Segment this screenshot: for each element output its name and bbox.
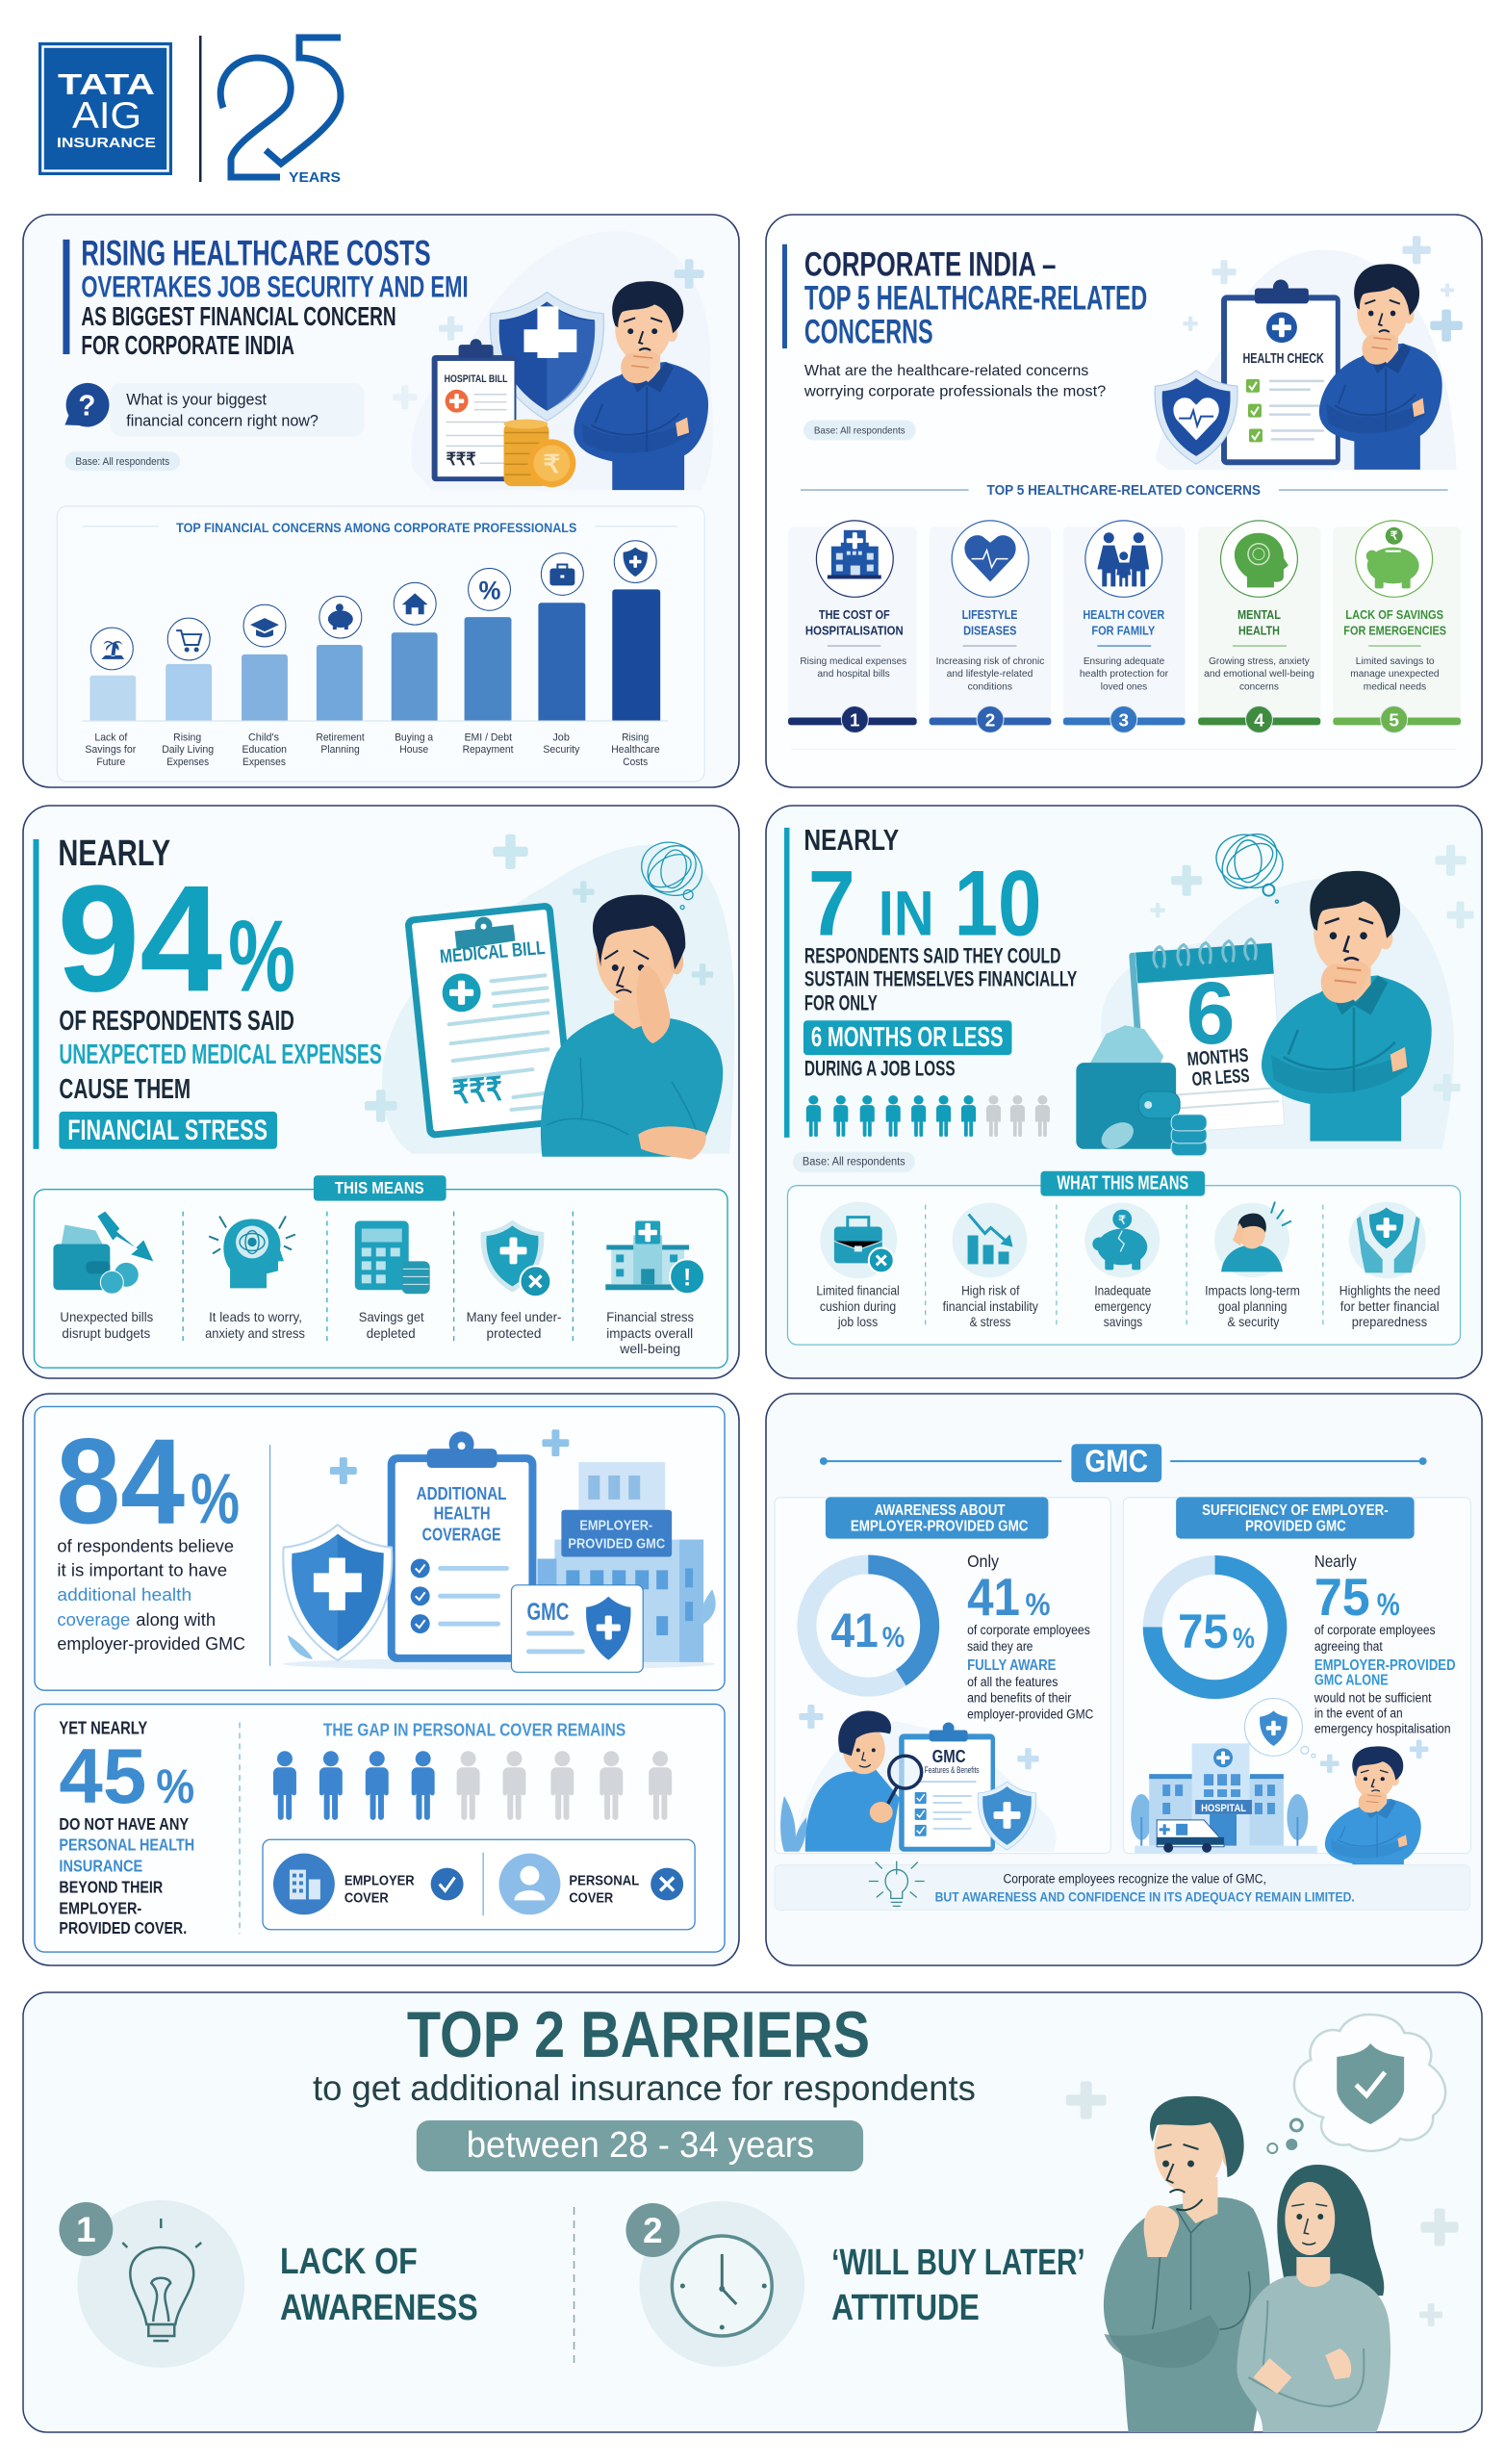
barrier 1: AWARENESS xyxy=(280,2288,478,2328)
icon: light bulb xyxy=(869,1861,925,1906)
chart labels: Future xyxy=(96,757,125,768)
awareness text xyxy=(967,1552,1093,1722)
panel: rising healthcare costs xyxy=(23,215,739,787)
heading: GMC: GMC xyxy=(1084,1443,1148,1478)
logo: Tata AIG Insurance: INSURANCE xyxy=(57,135,156,151)
barrier 2: ATTITUDE xyxy=(831,2288,980,2328)
title: TOP 5 HEALTHCARE-RELATED xyxy=(804,279,1147,317)
personal cover: COVER xyxy=(569,1889,613,1906)
concern card 3: loved ones xyxy=(1101,682,1147,693)
stat description: CAUSE THEM xyxy=(59,1074,191,1105)
chart labels: Job xyxy=(552,732,570,743)
stat description: FOR ONLY xyxy=(804,990,878,1014)
employer and personal cover comparison xyxy=(263,1839,695,1930)
icon: worried head xyxy=(209,1217,295,1288)
concern card 3: Ensuring adequate xyxy=(1084,656,1164,667)
question prompt: ? xyxy=(78,389,95,423)
logo: Tata AIG Insurance xyxy=(38,42,172,175)
what this means labels: Inadequate xyxy=(1094,1282,1151,1297)
illustration: man with health check clipboard: HEALTH CHECK xyxy=(1243,351,1324,367)
stat: 7 in 10: 7 xyxy=(808,851,855,956)
concern card 3 xyxy=(1063,521,1186,732)
illustration: young couple thinking xyxy=(1066,2015,1459,2432)
base note xyxy=(64,451,180,471)
illustration: hospital and worried man: HOSPITAL xyxy=(1201,1803,1246,1814)
pictogram: people xyxy=(273,1751,672,1820)
text: during a job loss: DURING A JOB LOSS xyxy=(804,1057,956,1081)
awareness text: and benefits of their xyxy=(967,1690,1072,1706)
awareness text: of all the features xyxy=(967,1674,1058,1689)
sufficiency text: % xyxy=(1377,1586,1400,1622)
stat: 45% xyxy=(59,1733,194,1820)
this-means labels: Many feel under- xyxy=(467,1309,562,1324)
concern card 2 xyxy=(930,521,1051,732)
concern card 5: manage unexpected xyxy=(1350,669,1440,680)
thought bubble with shield xyxy=(1267,2015,1445,2153)
chart icons: % xyxy=(479,576,501,604)
sufficiency text: would not be sufficient xyxy=(1314,1690,1432,1706)
sufficiency text: Nearly xyxy=(1314,1552,1357,1571)
concern card 1: THE COST OF xyxy=(819,607,890,622)
concern card 2: and lifestyle-related xyxy=(947,669,1033,680)
question text xyxy=(804,363,1106,400)
logo: Tata AIG Insurance: TATA xyxy=(58,67,155,101)
title accent bar xyxy=(33,839,38,1149)
heading: the gap: THE GAP IN PERSONAL COVER REMAINS xyxy=(323,1720,625,1740)
this means box xyxy=(34,1175,727,1368)
stat description xyxy=(59,1814,194,1938)
concern card 1: and hospital bills xyxy=(817,669,890,680)
man xyxy=(1104,2096,1270,2432)
base note xyxy=(804,421,916,440)
stat: 94%: % xyxy=(228,899,295,1013)
concern card 4: concerns xyxy=(1239,682,1279,693)
chart labels: Daily Living xyxy=(162,744,214,756)
question prompt: financial concern right now? xyxy=(126,413,319,430)
sufficiency text: EMPLOYER-PROVIDED xyxy=(1314,1657,1456,1674)
concern card 4: 4 xyxy=(1254,710,1264,731)
age pill: between 28 - 34 years xyxy=(467,2125,814,2166)
this-means labels: disrupt budgets xyxy=(62,1325,150,1341)
stat: 45%: % xyxy=(156,1759,194,1813)
logo: Tata AIG Insurance: AIG xyxy=(72,95,141,137)
concern card 5: 5 xyxy=(1389,710,1399,731)
sufficiency text: GMC ALONE xyxy=(1314,1673,1389,1689)
what this means labels: & stress xyxy=(970,1314,1011,1329)
bar chart: top financial concerns: TOP FINANCIAL CONCERNS AMONG CORPORATE PROFESSIONALS xyxy=(176,521,576,535)
illustration: shield, clipboard, building, GMC card: HEALTH xyxy=(434,1504,491,1525)
icon: light bulb xyxy=(122,2219,201,2341)
summary strip: Corporate employees recognize the value of GMC, xyxy=(1004,1871,1266,1886)
what this means labels xyxy=(816,1282,1441,1329)
employer cover xyxy=(273,1854,464,1914)
base note xyxy=(793,1152,915,1172)
sufficiency text xyxy=(1314,1552,1456,1735)
donut: 41% xyxy=(806,1564,930,1687)
concern card 1: 1 xyxy=(850,710,860,731)
this-means labels: Unexpected bills xyxy=(60,1309,153,1324)
illustration: worried man with hospital bill and shield xyxy=(393,231,713,490)
stat: 45%: 45 xyxy=(59,1733,146,1820)
title: RISING HEALTHCARE COSTS xyxy=(81,234,431,273)
stat: 7 in 10 xyxy=(808,851,1041,956)
question prompt: What is your biggest xyxy=(126,392,267,409)
concern card 5: Limited savings to xyxy=(1356,656,1435,667)
icon: hospital alert: ! xyxy=(683,1264,691,1291)
what this means labels: goal planning xyxy=(1218,1298,1287,1314)
employer cover: EMPLOYER xyxy=(344,1873,415,1888)
illustration: man inspecting GMC clipboard xyxy=(780,1705,1057,1852)
heading: yet nearly: YET NEARLY xyxy=(59,1718,148,1738)
icon: declining chart xyxy=(968,1215,1012,1264)
concern card 5 xyxy=(1333,521,1461,732)
heading: nearly: NEARLY xyxy=(804,823,900,857)
concern card 2: Increasing risk of chronic xyxy=(936,656,1044,667)
barrier 2: 2 xyxy=(643,2211,663,2250)
awareness text: % xyxy=(1025,1586,1050,1622)
concern card 4: HEALTH xyxy=(1238,624,1280,638)
bar chart: top financial concerns xyxy=(57,506,704,782)
pictogram: 7 of 10 people xyxy=(806,1095,1050,1137)
title xyxy=(81,234,469,360)
chart labels: Repayment xyxy=(463,744,513,756)
awareness text: of corporate employees xyxy=(967,1622,1090,1637)
panel: top 2 barriers xyxy=(23,1992,1482,2432)
awareness text: said they are xyxy=(967,1638,1033,1654)
stat description: coverage xyxy=(57,1610,130,1630)
illustration: worried man with hospital bill and shield: ₹₹₹ xyxy=(446,449,476,469)
this-means labels: It leads to worry, xyxy=(209,1309,302,1324)
barrier 2: ‘WILL BUY LATER’ xyxy=(831,2243,1085,2283)
logo: 25 years: YEARS xyxy=(289,169,341,186)
subtitle: to get additional insurance for respondents xyxy=(313,2068,976,2108)
chart labels: Expenses xyxy=(242,757,286,768)
icon: clock xyxy=(672,2236,772,2336)
this-means labels: impacts overall xyxy=(606,1325,693,1341)
summary strip xyxy=(775,1861,1470,1910)
what this means labels: preparedness xyxy=(1352,1314,1427,1329)
illustration: shield, clipboard, building, GMC card: ADDITIONAL xyxy=(417,1484,506,1504)
card: sufficiency xyxy=(1123,1497,1471,1883)
barrier 1 xyxy=(59,2200,478,2368)
barrier 1: LACK OF xyxy=(280,2242,418,2282)
concern card 3: health protection for xyxy=(1080,669,1169,680)
chart labels: Costs xyxy=(623,757,649,768)
title accent bar xyxy=(63,240,69,354)
chart icons xyxy=(90,541,656,670)
chart labels: Rising xyxy=(173,732,201,743)
sufficiency text: agreeing that xyxy=(1314,1638,1383,1654)
age pill xyxy=(417,2120,863,2171)
question text: worrying corporate professionals the most? xyxy=(804,384,1106,400)
stat description: INSURANCE xyxy=(59,1857,142,1876)
heading: nearly: NEARLY xyxy=(58,834,170,874)
donut: 41%: 41 xyxy=(830,1604,879,1657)
chart labels: Planning xyxy=(320,744,360,756)
panel: 94% financial stress xyxy=(23,806,739,1378)
donut: 75%: 75 xyxy=(1178,1604,1229,1658)
panel: 84% additional coverage xyxy=(23,1394,739,1965)
title accent bar xyxy=(784,828,789,1138)
stat description: PROVIDED COVER. xyxy=(59,1918,187,1938)
illustration: stressed man with medical bill xyxy=(365,834,735,1160)
concern card 1 xyxy=(788,521,917,732)
title: CORPORATE INDIA – xyxy=(804,246,1056,284)
concern card 3: FOR FAMILY xyxy=(1091,624,1156,638)
personal cover: PERSONAL xyxy=(569,1873,639,1888)
title: FOR CORPORATE INDIA xyxy=(81,330,294,360)
sufficiency text: 75 xyxy=(1314,1567,1370,1627)
chart labels: Rising xyxy=(622,732,649,743)
what this means labels: High risk of xyxy=(961,1282,1020,1297)
stat description: additional health xyxy=(57,1585,191,1605)
stat: 7 in 10: IN xyxy=(879,878,934,949)
base note: Base: All respondents xyxy=(814,425,906,436)
employer cover: COVER xyxy=(344,1889,389,1906)
what this means labels: job loss xyxy=(837,1314,878,1329)
concern card 4: MENTAL xyxy=(1237,607,1281,622)
chart labels xyxy=(85,732,660,768)
concern card 3: 3 xyxy=(1118,710,1129,731)
this-means labels: protected xyxy=(487,1325,541,1341)
illustration: man inspecting GMC clipboard: Features & Benefits xyxy=(925,1765,980,1775)
chart labels: EMI / Debt xyxy=(465,732,512,743)
illustration: shield, clipboard, building, GMC card xyxy=(283,1429,716,1672)
title xyxy=(804,246,1147,351)
awareness text: 41 xyxy=(967,1567,1020,1627)
stat description: along with xyxy=(136,1610,216,1630)
this-means labels: Savings get xyxy=(359,1309,424,1324)
highlight: financial stress xyxy=(59,1112,277,1149)
illustration: man with calendar and wallet: OR LESS xyxy=(1191,1065,1250,1091)
concern card 4: and emotional well-being xyxy=(1204,669,1314,680)
chart labels: Lack of xyxy=(94,732,128,743)
personal cover xyxy=(499,1854,683,1914)
concern card 5: ₹ xyxy=(1390,529,1398,543)
summary strip: BUT AWARENESS AND CONFIDENCE IN ITS ADEQUACY REMAIN LIMITED. xyxy=(935,1888,1355,1904)
this-means labels: well-being xyxy=(619,1341,680,1356)
icon: hospital alert xyxy=(605,1221,704,1294)
stat description: RESPONDENTS SAID THEY COULD xyxy=(804,943,1060,967)
illustration: man with calendar and wallet: MONTHS xyxy=(1186,1045,1249,1070)
chart labels: Savings for xyxy=(85,744,137,756)
stat description xyxy=(59,1006,382,1105)
stat description: of respondents believe xyxy=(57,1537,234,1557)
illustration: shield, clipboard, building, GMC card: EMPLOYER- xyxy=(579,1518,652,1534)
question prompt xyxy=(64,383,365,436)
section heading: TOP 5 HEALTHCARE-RELATED CONCERNS xyxy=(987,482,1261,499)
card: awareness: EMPLOYER-PROVIDED GMC xyxy=(851,1519,1029,1535)
card: 84% xyxy=(35,1406,725,1690)
illustration: stressed man with medical bill: ₹₹₹ xyxy=(451,1071,504,1112)
chart labels: Buying a xyxy=(395,732,434,743)
what this means box xyxy=(787,1171,1461,1345)
chart labels: Security xyxy=(543,744,580,756)
illustration: shield, clipboard, building, GMC card: PROVIDED GMC xyxy=(568,1536,665,1553)
sufficiency text: in the event of an xyxy=(1314,1706,1403,1721)
concern card 5: medical needs xyxy=(1364,682,1426,693)
concern card 2: conditions xyxy=(968,682,1012,693)
what this means labels: Highlights the need xyxy=(1339,1282,1441,1297)
stat description: DO NOT HAVE ANY xyxy=(59,1814,189,1834)
concern card 2: LIFESTYLE xyxy=(962,607,1018,622)
stat description: it is important to have xyxy=(57,1560,227,1580)
icon: calculator and coins xyxy=(355,1221,430,1294)
what this means labels: & security xyxy=(1228,1314,1279,1329)
stat description: employer-provided GMC xyxy=(57,1634,245,1655)
stat description: UNEXPECTED MEDICAL EXPENSES xyxy=(59,1040,382,1070)
icon: man holding head xyxy=(1221,1202,1291,1271)
chart labels: Expenses xyxy=(166,757,210,768)
chart labels: Education xyxy=(242,744,287,756)
awareness text: employer-provided GMC xyxy=(967,1707,1093,1722)
sufficiency text: of corporate employees xyxy=(1314,1622,1436,1637)
illustration: man inspecting GMC clipboard: GMC xyxy=(932,1747,966,1767)
title: CONCERNS xyxy=(804,314,933,351)
question text: What are the healthcare-related concerns xyxy=(804,363,1088,379)
this-means labels: depleted xyxy=(367,1325,416,1341)
illustration: man with calendar and wallet xyxy=(1076,823,1474,1156)
stat: 94%: 94 xyxy=(57,854,222,1023)
icon: hands holding shield xyxy=(1357,1208,1420,1272)
concern card 4 xyxy=(1198,521,1320,732)
title: OVERTAKES JOB SECURITY AND EMI xyxy=(81,269,469,303)
donut: 75% xyxy=(1153,1565,1277,1689)
stat description xyxy=(804,943,1078,1014)
concern card 5: LACK OF SAVINGS xyxy=(1345,607,1443,622)
title: AS BIGGEST FINANCIAL CONCERN xyxy=(81,301,396,331)
what this means labels: Limited financial xyxy=(816,1282,900,1297)
panel: top 5 healthcare concerns xyxy=(766,215,1482,787)
concern card 2: DISEASES xyxy=(963,624,1017,638)
what this means labels: emergency xyxy=(1094,1298,1151,1314)
illustration: shield, clipboard, building, GMC card: COVERAGE xyxy=(422,1526,501,1546)
base note: Base: All respondents xyxy=(75,456,170,468)
concern card 1: Rising medical expenses xyxy=(800,656,906,667)
concern card 1: HOSPITALISATION xyxy=(805,624,904,638)
base note: Base: All respondents xyxy=(803,1155,906,1168)
panel: GMC xyxy=(766,1394,1482,1965)
awareness text: FULLY AWARE xyxy=(967,1657,1056,1674)
stat description: BEYOND THEIR xyxy=(59,1877,163,1896)
illustration: stressed man with medical bill: MEDICAL BILL xyxy=(439,937,546,967)
chart labels: House xyxy=(399,744,428,756)
what this means box: WHAT THIS MEANS xyxy=(1057,1173,1188,1194)
icon: shield with cross xyxy=(481,1220,550,1296)
illustration: man with calendar and wallet: 6 xyxy=(1186,964,1236,1063)
chart labels: Healthcare xyxy=(611,744,660,756)
card: awareness xyxy=(775,1497,1110,1854)
what this means labels: financial instability xyxy=(943,1298,1038,1314)
what this means labels: savings xyxy=(1104,1314,1142,1329)
title accent bar xyxy=(782,244,787,348)
illustration: hospital and worried man xyxy=(1131,1699,1428,1883)
heading: GMC xyxy=(820,1443,1427,1482)
illustration: worried man with hospital bill and shield: ₹ xyxy=(543,451,560,478)
what this means labels: for better financial xyxy=(1340,1298,1440,1314)
icon: wallet falling arrow xyxy=(53,1212,153,1294)
panel: 7 in 10 xyxy=(766,806,1482,1378)
concern card 4: Growing stress, anxiety xyxy=(1209,656,1311,667)
illustration: worried man with hospital bill and shield: HOSPITAL BILL xyxy=(445,373,507,385)
this-means labels: Financial stress xyxy=(606,1309,694,1324)
card: sufficiency: SUFFICIENCY OF EMPLOYER- xyxy=(1202,1502,1389,1519)
concern card 2: 2 xyxy=(985,710,995,731)
chart labels: Retirement xyxy=(316,732,365,743)
icon: cracked piggy bank xyxy=(1092,1210,1147,1270)
stat description xyxy=(57,1537,245,1655)
awareness text: Only xyxy=(967,1552,999,1571)
title: TOP 2 BARRIERS xyxy=(407,1998,870,2071)
this-means labels: anxiety and stress xyxy=(205,1325,305,1341)
chart labels: Child's xyxy=(248,732,279,743)
card: awareness: AWARENESS ABOUT xyxy=(875,1502,1006,1519)
stat: 84%: 84 xyxy=(56,1413,185,1550)
sufficiency text: emergency hospitalisation xyxy=(1314,1720,1451,1735)
stat description: PERSONAL HEALTH xyxy=(59,1835,194,1855)
donut: 41%: % xyxy=(882,1622,905,1654)
woman xyxy=(1237,2165,1390,2432)
concern card 3: HEALTH COVER xyxy=(1083,607,1165,622)
highlight: 6 months or less: 6 MONTHS OR LESS xyxy=(811,1022,1004,1053)
barrier 1: 1 xyxy=(76,2210,96,2249)
illustration: man with health check clipboard xyxy=(1155,236,1463,470)
barrier 2 xyxy=(625,2201,1085,2367)
card: 45% gap xyxy=(35,1705,725,1952)
stat description: SUSTAIN THEMSELVES FINANCIALLY xyxy=(804,966,1078,990)
logo: 25 years xyxy=(199,36,341,186)
highlight: financial stress: FINANCIAL STRESS xyxy=(67,1115,268,1146)
illustration: shield, clipboard, building, GMC card: GMC xyxy=(526,1599,569,1626)
stat description: OF RESPONDENTS SAID xyxy=(59,1006,294,1037)
concern card 5: FOR EMERGENCIES xyxy=(1343,624,1446,638)
stat description: EMPLOYER- xyxy=(59,1898,141,1917)
stat: 84%: % xyxy=(191,1458,240,1539)
highlight: 6 months or less xyxy=(804,1020,1011,1055)
what this means labels: cushion during xyxy=(820,1298,896,1314)
stat: 7 in 10: 10 xyxy=(955,851,1041,956)
icon: cracked piggy bank: ₹ xyxy=(1118,1214,1126,1227)
what this means labels: Impacts long-term xyxy=(1205,1282,1300,1297)
donut: 75%: % xyxy=(1233,1623,1255,1655)
card: sufficiency: PROVIDED GMC xyxy=(1245,1519,1346,1535)
this means box: THIS MEANS xyxy=(335,1178,424,1197)
icon: briefcase with cross xyxy=(834,1218,894,1272)
this-means labels xyxy=(60,1309,694,1356)
